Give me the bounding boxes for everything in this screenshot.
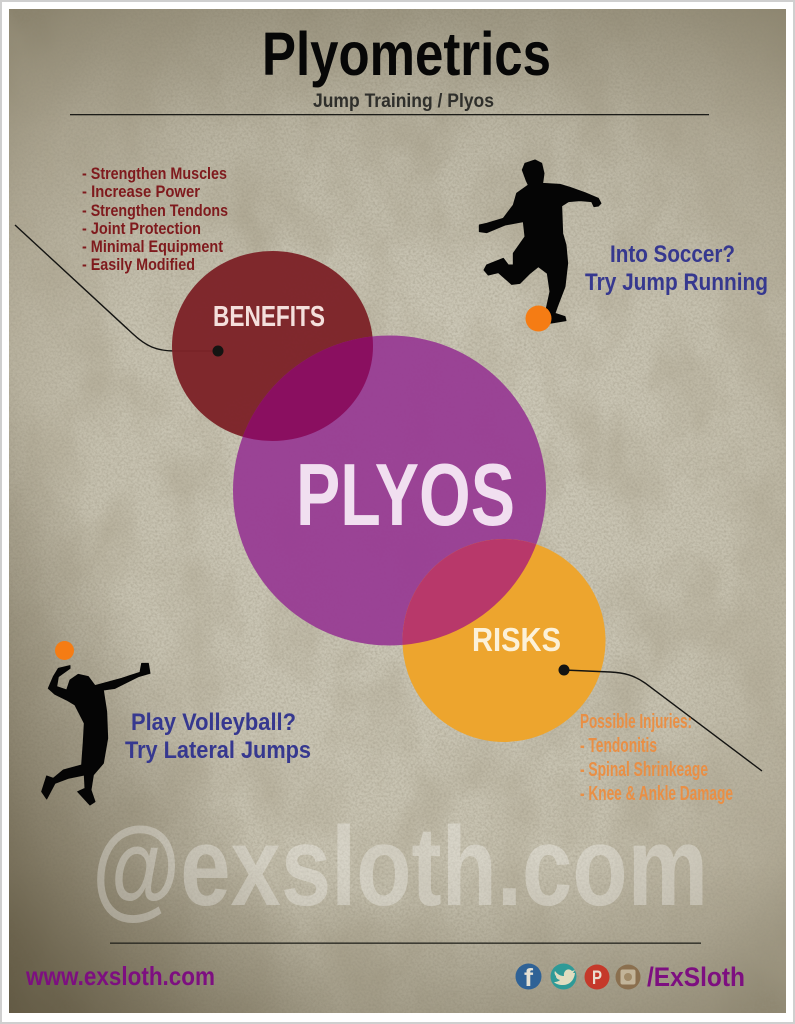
subtitle: Jump Training / Plyos <box>313 90 494 112</box>
label: benefits: BENEFITS <box>213 301 325 333</box>
title: Plyometrics <box>262 20 551 88</box>
benefits list: - Increase Power <box>82 183 201 201</box>
venn diagram <box>172 251 606 742</box>
benefits list <box>82 165 228 274</box>
icon: instagram <box>616 964 640 990</box>
benefits connector <box>15 225 218 351</box>
soccer caption: Try Jump Running <box>585 269 768 296</box>
benefits dot <box>212 346 224 356</box>
icon: pinterest: P <box>592 968 602 989</box>
volleyball caption <box>125 709 311 764</box>
risks list: Possible Injuries: <box>580 711 692 733</box>
label: plyos: PLYOS <box>296 445 515 544</box>
website link: www.exsloth.com <box>25 961 215 991</box>
overlap: risks and plyos <box>402 539 536 645</box>
overlap: benefits and plyos <box>242 336 373 441</box>
benefits list: - Strengthen Tendons <box>82 202 228 220</box>
header rule <box>70 114 709 115</box>
volleyball caption: Play Volleyball? <box>131 709 296 736</box>
soccer ball <box>526 306 552 332</box>
social handle: /ExSloth <box>647 962 745 992</box>
label: risks: RISKS <box>472 621 561 658</box>
risks list: - Tendonitis <box>580 735 657 757</box>
benefits list: - Joint Protection <box>82 220 201 238</box>
volleyball ball <box>55 641 74 660</box>
icon: twitter <box>550 964 576 990</box>
volleyball player silhouette <box>42 663 150 805</box>
soccer caption <box>585 241 768 296</box>
soccer player silhouette <box>479 160 601 323</box>
social icons <box>516 964 640 992</box>
risks connector <box>564 670 762 771</box>
benefits list: - Strengthen Muscles <box>82 165 227 183</box>
circle: benefits <box>172 251 373 441</box>
risks list <box>580 711 733 805</box>
benefits list: - Minimal Equipment <box>82 238 223 256</box>
icon: facebook: f <box>524 964 534 992</box>
footer rule <box>110 942 701 944</box>
soccer caption: Into Soccer? <box>610 241 735 268</box>
benefits list: - Easily Modified <box>82 256 195 274</box>
circle: plyos <box>233 336 546 646</box>
risks list: - Spinal Shrinkeage <box>580 759 708 781</box>
circle: risks <box>402 539 606 742</box>
risks dot <box>558 664 570 676</box>
volleyball caption: Try Lateral Jumps <box>125 737 311 764</box>
